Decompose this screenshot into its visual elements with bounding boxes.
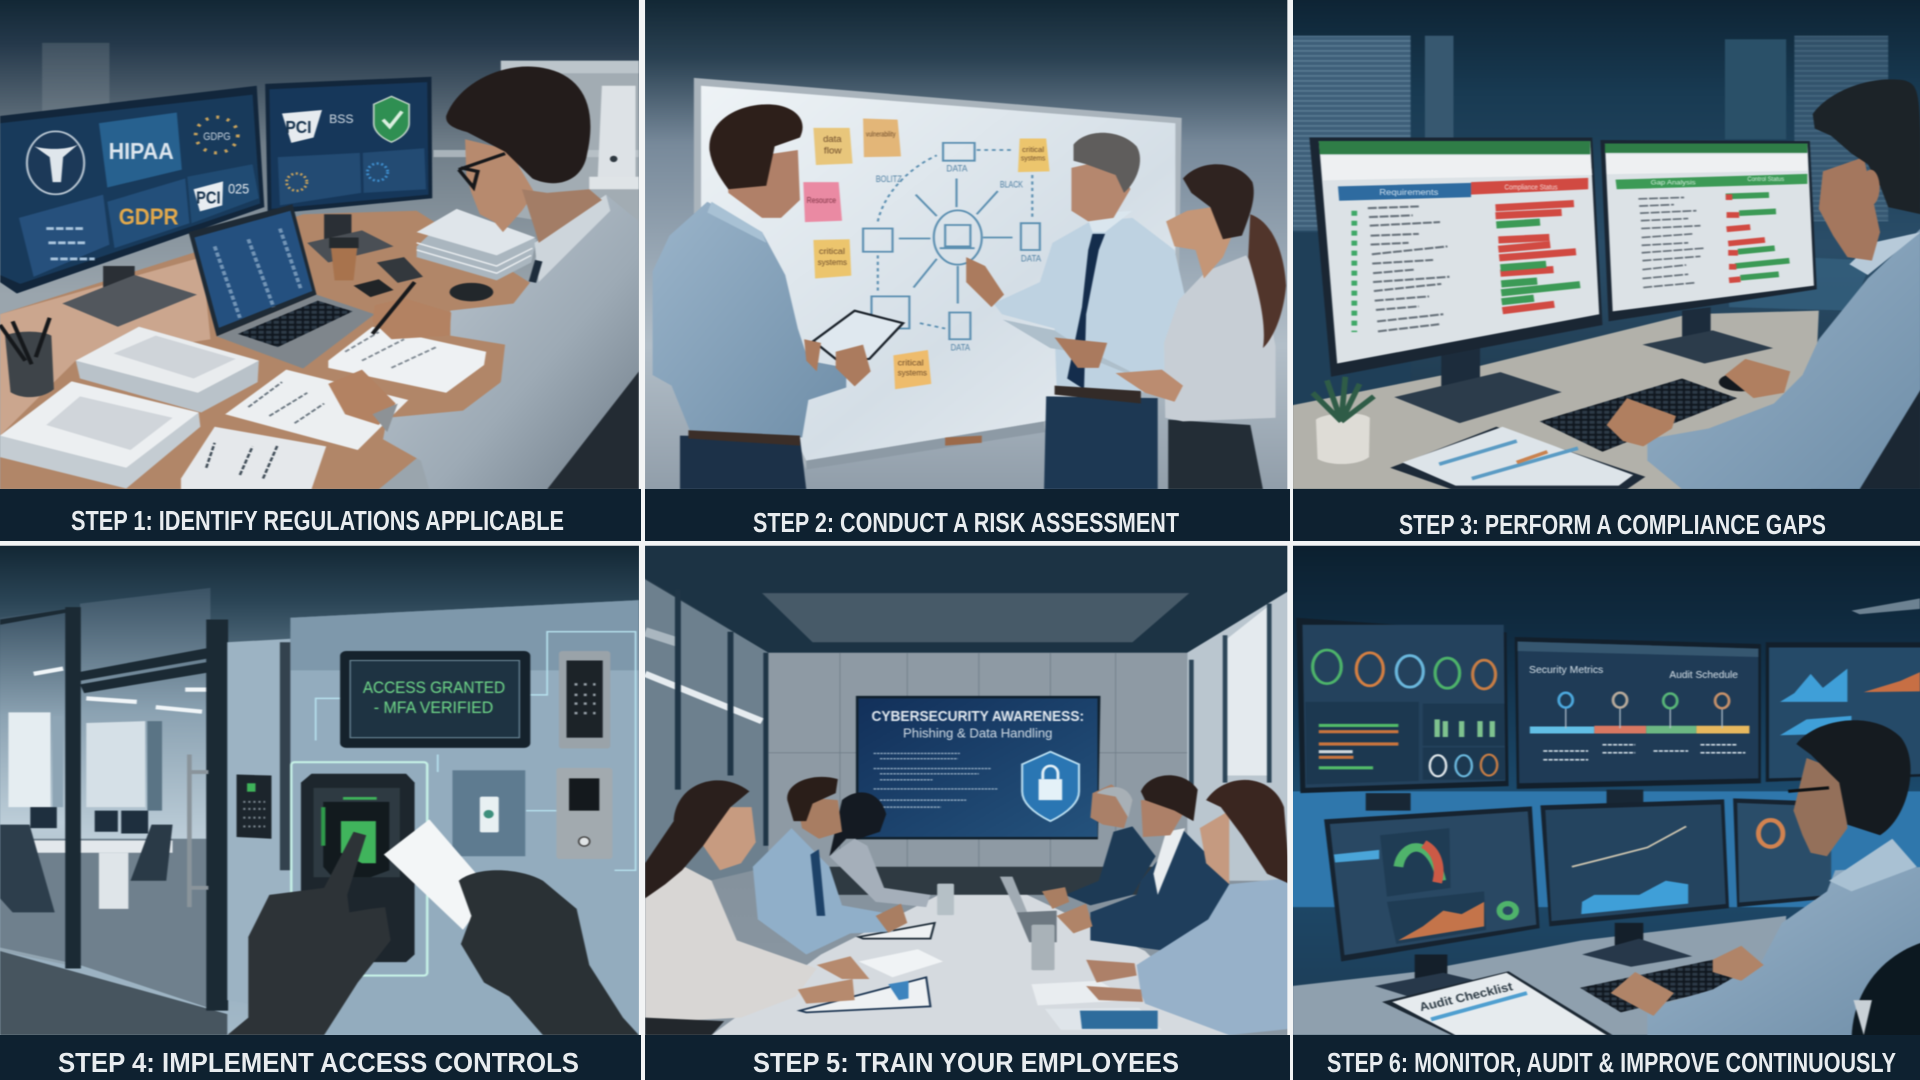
data flow diagram <box>863 143 1041 353</box>
sticky notes: Resource <box>807 196 836 205</box>
sticky notes: data <box>823 135 842 145</box>
man with clipboard <box>653 104 903 489</box>
clipboard: audit checklist: Audit Checklist <box>1417 979 1515 1014</box>
phone NFC panel <box>452 770 525 856</box>
pen cup <box>0 318 54 397</box>
heading: step 2: STEP 2: CONDUCT A RISK ASSESSMENT <box>753 507 1179 538</box>
monitor: second compliance sheet: Control Status <box>1747 176 1785 183</box>
monitor: gauge dashboard <box>1324 806 1540 961</box>
analyst at desk <box>1611 720 1920 1042</box>
desk <box>1292 916 1786 1035</box>
man writing <box>328 66 639 489</box>
keypad panel <box>559 651 610 749</box>
man with tablet <box>966 133 1185 489</box>
wall keypad <box>237 775 271 839</box>
back wall panels <box>768 653 1187 895</box>
monitor: second compliance sheet <box>1600 140 1817 321</box>
presentation screen: CYBERSECURITY AWARENESS: <box>871 709 1084 725</box>
access status display: - MFA VERIFIED <box>374 698 493 717</box>
clipboard <box>1390 427 1645 489</box>
heading: step 1: STEP 1: IDENTIFY REGULATIONS APPLICABLE <box>71 505 564 536</box>
door handle <box>189 755 208 907</box>
access card <box>384 819 492 930</box>
panel: step 6 monitor and audit <box>1284 541 1920 1042</box>
left gloved hand <box>227 832 391 1035</box>
conference table <box>712 895 1229 1035</box>
sticky notes <box>803 119 1050 389</box>
monitor: regulation tiles: PCI <box>196 188 221 207</box>
ceiling <box>636 541 1297 653</box>
monitor stands top <box>1366 790 1643 811</box>
presentation screen <box>856 696 1100 839</box>
seated team right side <box>1042 775 1297 1035</box>
monitor: security metrics timeline <box>1515 637 1761 789</box>
monitor: trend dashboard <box>1540 799 1729 926</box>
sticky notes: systems <box>818 258 847 267</box>
laptops, papers and glasses <box>800 877 1162 1030</box>
monitor stands <box>62 214 394 327</box>
open books <box>0 327 259 489</box>
access status display: ACCESS GRANTED <box>363 678 505 697</box>
sticky notes: critical <box>819 247 845 256</box>
lock shield icon <box>1022 752 1079 821</box>
heading: step 4: STEP 4: IMPLEMENT ACCESS CONTROLS <box>58 1047 579 1078</box>
blue lit back wall <box>1284 791 1920 907</box>
shelf with binders <box>434 61 639 221</box>
monitor: PCI DSS and shield <box>265 77 432 214</box>
caption bar: step 1 <box>0 489 642 542</box>
monitor: regulation tiles: HIPAA <box>109 139 174 164</box>
carpet floor <box>0 951 227 1035</box>
data flow diagram: BOLITZ <box>876 175 902 185</box>
monitor stands bottom <box>1375 923 1692 998</box>
sticky notes: vulnerability <box>866 130 896 138</box>
wall and circuit lines <box>227 600 639 1035</box>
stack of papers <box>417 209 537 280</box>
panel: step 1 identify regulations <box>0 0 648 496</box>
handwritten notes <box>181 327 486 489</box>
caption bar: step 4 <box>0 1035 642 1080</box>
heading: step 5: STEP 5: TRAIN YOUR EMPLOYEES <box>753 1047 1179 1078</box>
desk <box>0 211 535 489</box>
card reader panel <box>556 768 612 859</box>
shield icon <box>374 96 409 142</box>
panel: step 5 train employees <box>636 541 1297 1040</box>
desk <box>1292 311 1819 489</box>
data flow diagram: DATA <box>951 343 970 353</box>
caption bar: step 3 <box>1293 489 1920 542</box>
monitor: requirements sheet: Requirements <box>1379 188 1439 197</box>
panel: step 3 compliance gaps <box>1284 0 1920 496</box>
monitor: security metrics timeline: Audit Schedule <box>1669 670 1738 681</box>
data flow diagram: DATA <box>946 164 968 174</box>
biometric fingerprint reader <box>291 762 427 976</box>
access status display <box>340 651 530 748</box>
data flow diagram: DATA <box>1021 254 1041 264</box>
caption bar: step 2 <box>645 489 1290 542</box>
monitor: regulation tiles: 025 <box>228 183 249 197</box>
monitor: security metrics timeline: Security Metrics <box>1529 665 1603 676</box>
panel: step 4 access controls <box>0 541 648 1040</box>
left glass wall <box>636 574 768 898</box>
window blinds <box>1292 36 1888 230</box>
presentation screen: Phishing & Data Handling <box>903 726 1052 740</box>
sticky notes: critical <box>898 358 924 368</box>
seated team left side <box>645 777 930 1035</box>
monitor stands <box>1394 307 1773 423</box>
keyboard <box>1540 373 1764 452</box>
woman with ponytail <box>1116 164 1286 489</box>
medical seal icon <box>27 131 84 194</box>
man at keyboard <box>1607 79 1920 489</box>
monitor: PCI DSS and shield: BSS <box>329 112 354 126</box>
office behind glass <box>0 588 227 1007</box>
panel: step 2 risk assessment <box>636 0 1297 496</box>
caption bar: step 5 <box>645 1035 1290 1080</box>
clipboard: audit checklist <box>1382 971 1613 1035</box>
monitor: regulation tiles <box>0 86 264 294</box>
potted plant <box>1313 377 1374 464</box>
sticky notes: systems <box>898 368 927 377</box>
monitor: area charts right <box>1766 642 1920 782</box>
laptop <box>189 204 375 369</box>
glass door frame <box>0 607 228 1011</box>
sticky notes: systems <box>1021 154 1045 163</box>
monitor: requirements sheet <box>1309 137 1602 377</box>
monitor: regulation tiles: GDPR <box>119 204 179 230</box>
monitor: requirements sheet: Compliance Status <box>1505 183 1558 191</box>
data flow diagram: BLACK <box>1000 180 1023 190</box>
keyboard <box>1580 960 1747 1012</box>
monitor: PCI DSS and shield: PCI <box>285 117 311 137</box>
right gloved hand <box>459 870 639 1035</box>
background furniture <box>1293 232 1322 296</box>
monitor: regulation tiles: GDPG <box>203 131 231 143</box>
sticky notes: flow <box>824 146 842 156</box>
right windows <box>1187 586 1297 881</box>
whiteboard <box>694 78 1182 470</box>
monitor: donut dashboard <box>1733 798 1831 907</box>
sticky notes: critical <box>1022 145 1044 154</box>
cup, phone and mouse <box>329 237 493 301</box>
monitor: KPI rings <box>1296 618 1509 793</box>
caption bar: step 6 <box>1293 1035 1920 1080</box>
monitor: second compliance sheet: Gap Analysis <box>1651 180 1696 186</box>
